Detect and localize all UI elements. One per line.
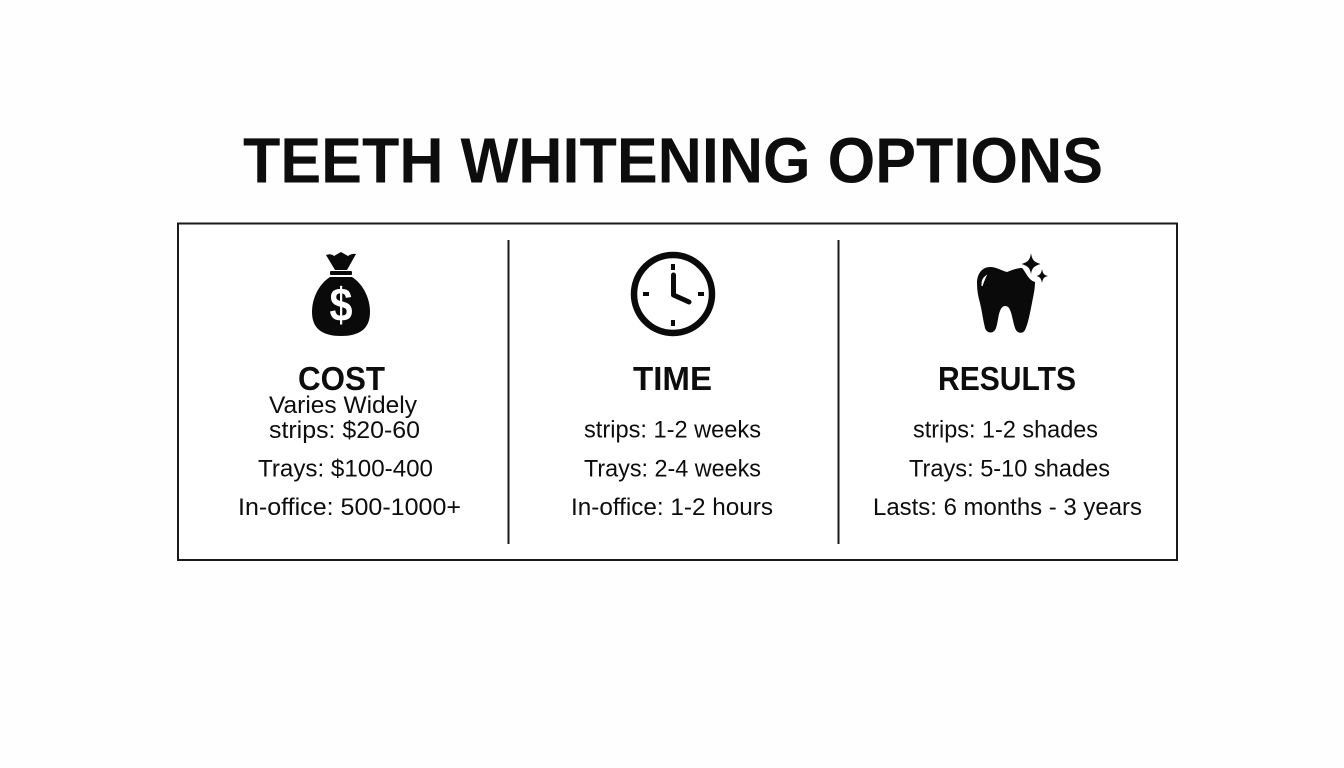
icon: money bag — [312, 252, 370, 336]
column: time — [571, 255, 773, 521]
icon: money bag: $ — [330, 278, 352, 331]
column: cost — [238, 252, 461, 521]
heading: cost: COST — [298, 360, 385, 397]
text: strips results: strips: 1-2 shades — [913, 416, 1098, 444]
title: TEETH WHITENING OPTIONS — [243, 124, 1103, 196]
heading: results: RESULTS — [938, 360, 1076, 397]
heading: time: TIME — [633, 360, 712, 397]
text: trays time: Trays: 2-4 weeks — [584, 456, 761, 482]
icon: sparkling tooth — [977, 253, 1048, 333]
text: in-office time: In-office: 1-2 hours — [571, 494, 773, 521]
panel: comparison table — [178, 224, 1177, 560]
text: lasts: Lasts: 6 months - 3 years — [873, 494, 1142, 521]
text: strips time: strips: 1-2 weeks — [584, 416, 761, 444]
text: trays results: Trays: 5-10 shades — [909, 456, 1110, 482]
text: varies widely: Varies Widely — [269, 392, 418, 419]
text: strips cost: strips: $20-60 — [269, 417, 420, 444]
text: in-office cost: In-office: 500-1000+ — [238, 494, 461, 521]
icon: clock — [634, 255, 712, 333]
column: results — [873, 253, 1142, 521]
text: trays cost: Trays: $100-400 — [258, 456, 433, 482]
